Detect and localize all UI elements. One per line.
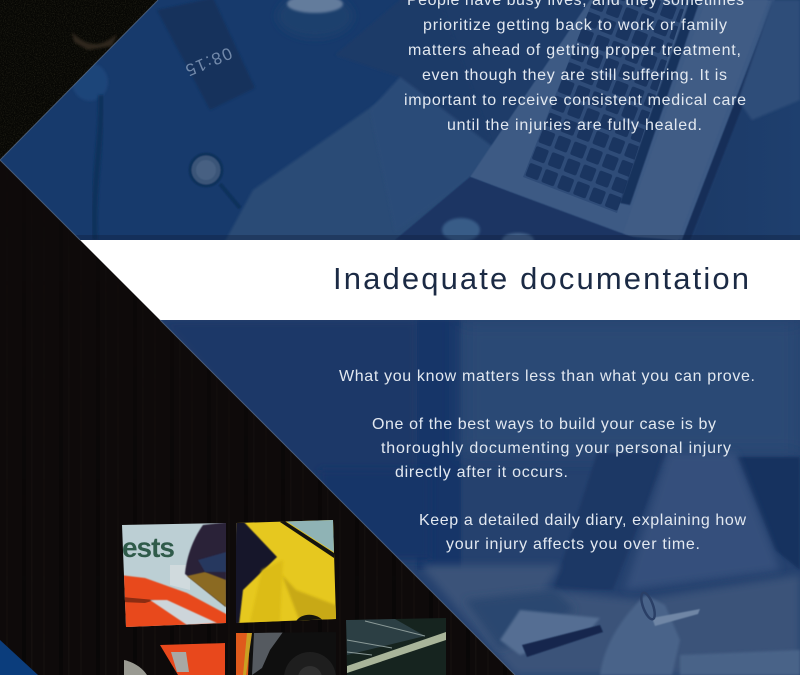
panel: wheel bottom-middle	[234, 630, 338, 675]
panel: red car top-left: ests	[122, 532, 175, 563]
background: dark gravel top-left	[0, 0, 170, 165]
panel: red car top-left	[122, 523, 226, 627]
body text: documentation paragraphs: One of the best ways to build your case is by	[372, 416, 716, 433]
paper	[500, 610, 600, 655]
laptop screen	[553, 453, 667, 590]
panel: top blue photo	[0, 0, 800, 247]
diagonal edge lines	[0, 0, 515, 675]
face shadow at top	[277, 0, 353, 38]
body text: treatment paragraph: until the injuries are fully healed.	[447, 117, 702, 134]
keyboard	[523, 0, 687, 213]
body text: documentation paragraphs: your injury affects you over time.	[446, 536, 700, 553]
background: dark wood lower-left	[0, 162, 2, 164]
laptop body	[470, 0, 775, 240]
hinge	[682, 34, 761, 240]
body text: treatment paragraph: important to receive consistent medical care	[404, 92, 746, 109]
desk	[420, 565, 800, 675]
heading: Inadequate documentation	[333, 261, 749, 296]
hand and pen	[600, 595, 680, 675]
body text: documentation paragraphs: What you know matters less than what you can prove.	[339, 368, 755, 385]
side panel	[622, 0, 768, 240]
body text: documentation paragraphs: Keep a detailed daily diary, explaining how	[419, 512, 746, 529]
heading band	[80, 240, 800, 320]
image panels: car crash	[120, 517, 448, 675]
body text: documentation paragraphs	[339, 368, 755, 553]
panel: dark windshield bottom-right	[344, 616, 448, 675]
icon: stethoscope	[72, 63, 240, 240]
icon: phone	[157, 0, 255, 110]
panel: lower blue photo	[160, 320, 800, 675]
right photo area	[400, 0, 800, 240]
body text: treatment paragraph	[404, 0, 746, 134]
body text: treatment paragraph: even though they are still suffering. It is	[422, 67, 727, 84]
panel: red car bottom-left	[124, 643, 226, 675]
shirt sleeve	[227, 106, 456, 240]
window column	[160, 320, 417, 480]
notebook corner	[395, 177, 640, 240]
icon: laptop	[470, 0, 800, 240]
body text: treatment paragraph: matters ahead of getting proper treatment,	[408, 42, 741, 59]
body text: documentation paragraphs: directly after it occurs.	[395, 464, 568, 481]
body text: documentation paragraphs: thoroughly documenting your personal injury	[381, 440, 731, 457]
icon: phone: 08:15	[181, 43, 235, 80]
speaker strip	[620, 0, 700, 205]
panel: yellow car top-right	[236, 520, 336, 623]
corner accent: blue triangle	[0, 640, 38, 675]
body text: treatment paragraph: prioritize getting back to work or family	[423, 17, 727, 34]
